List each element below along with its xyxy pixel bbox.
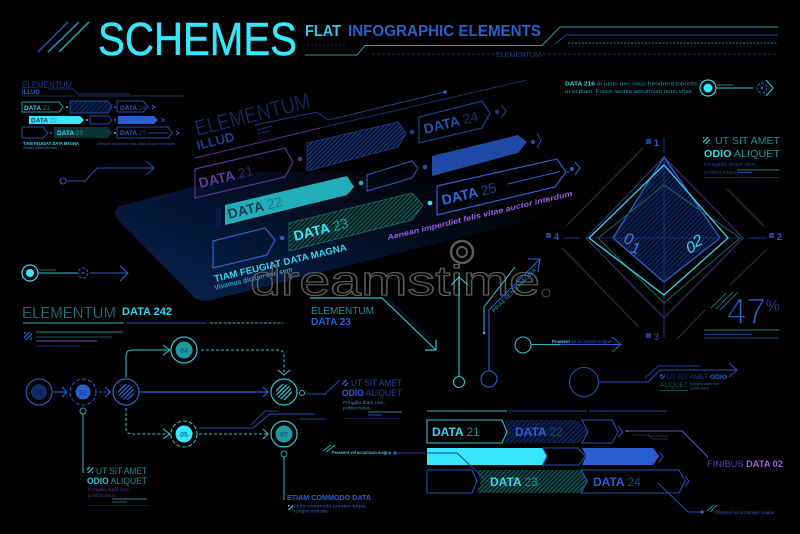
- panel: bottom data bars: [323, 411, 783, 515]
- bar: empty outlined: [427, 470, 477, 493]
- mini caption right: Aenean imperdiet felis vitae auctor interdum: [97, 141, 176, 146]
- perspective caption purple: Aenean imperdiet felis vitae auctor interdum: [385, 189, 574, 242]
- callout: node 06: [300, 378, 402, 418]
- axis label 4: [546, 232, 559, 242]
- rotated label: PRAESENT MAGNA: [491, 267, 538, 314]
- row: data 22 filled: DATA 22: [226, 193, 284, 222]
- label: elementum data 23: ELEMENTUM: [311, 306, 374, 317]
- icon: target connector: [700, 80, 773, 96]
- radar teal series: [598, 185, 740, 303]
- row: data 24: DATA 24: [422, 108, 480, 137]
- panel: mini data table: [22, 80, 183, 150]
- node 05: [171, 421, 197, 447]
- perspective caption small: Vivamus dictum nec sem: [214, 266, 293, 292]
- callout: node 06: UT SIT AMET: [351, 378, 402, 388]
- mini row 2: [29, 116, 164, 124]
- node 06: [271, 379, 297, 405]
- axis label 1: [646, 138, 659, 148]
- note text: DATA 216 at justo nec risus hendrerit lobortis: [565, 82, 697, 88]
- connector: small target with arrow: [515, 337, 621, 353]
- arrow: upper left connector: [60, 161, 154, 184]
- bar: blue filled: [582, 448, 663, 465]
- callout: node 07: congue molestie: [294, 508, 328, 514]
- node 03: [113, 379, 139, 405]
- radar blue hatched series: [613, 157, 720, 282]
- callout: node 07: [281, 451, 372, 514]
- callout: node 02: ODIO ALIQUET: [87, 476, 147, 486]
- arrow: up cyan: [451, 277, 468, 388]
- bar: data 24: DATA 24: [593, 475, 641, 489]
- label: elementum data 23: [311, 306, 374, 328]
- mini row 3: DATA 25: [120, 130, 146, 137]
- mini row 3: DATA 23: [57, 130, 83, 137]
- callout: node 06: ODIO ALIQUET: [342, 388, 402, 398]
- bar: data 22: [504, 420, 588, 443]
- node 01: [26, 379, 52, 405]
- radar axes: [564, 138, 767, 338]
- bar: cyan filled: [427, 448, 547, 465]
- panel: flow diagram: [22, 305, 402, 514]
- icon: title stripes: [38, 22, 89, 52]
- bar: data 23: DATA 23: [490, 475, 538, 489]
- connector: large circle arrow: Fringilla diam non,: [690, 382, 720, 386]
- radar label 02: 0: [684, 238, 699, 258]
- bar: data 21: DATA 21: [432, 425, 480, 439]
- connector: large circle arrow: UT SIT AMET ODIO: [667, 374, 727, 381]
- row: data 23 hatched: DATA 23: [292, 215, 350, 244]
- marker: [410, 130, 414, 134]
- node 07: [271, 421, 297, 447]
- node 02: 02: [79, 390, 87, 397]
- header rules: [305, 27, 778, 55]
- callout: right praesent: [658, 483, 774, 515]
- marker: [423, 165, 427, 169]
- axis label 3: [646, 332, 659, 342]
- bar: data 23: [477, 470, 588, 493]
- row: data 22 filled: [217, 176, 363, 227]
- axis label 2: 2: [777, 232, 782, 242]
- connector: large circle arrow: [570, 363, 737, 396]
- arrow: up right blue: [481, 259, 540, 387]
- mini row 1: [22, 101, 155, 113]
- subtitle blue: INFOGRAPHIC ELEMENTS: [348, 23, 541, 40]
- watermark: [250, 241, 550, 304]
- node 01: 01: [35, 390, 43, 397]
- node 07: 07: [280, 432, 288, 439]
- bar: outlined chevron top: [582, 420, 623, 443]
- node 04: [171, 337, 197, 363]
- flow connectors: [53, 345, 325, 439]
- callout: node 02: [80, 408, 147, 506]
- radar label 01: 0: [622, 230, 635, 249]
- stat rules: [704, 329, 779, 331]
- mini row 3: [22, 127, 179, 138]
- header small label: ELEMENTUM: [496, 52, 541, 59]
- row: data 21: [195, 148, 302, 198]
- callout: node 06: Fringilla diam non,: [343, 400, 385, 406]
- panel: radar chart: [546, 135, 782, 342]
- perspective heading: ELEMENTUM: [192, 88, 313, 141]
- mini rules: [22, 89, 183, 96]
- stat stripes: [711, 292, 738, 310]
- mini row 1: DATA 24: [120, 105, 146, 112]
- perspective rules: [195, 80, 527, 158]
- stat 47%: 47: [727, 291, 768, 332]
- callout: node 07: Nunc commodo porttitor turpis,: [294, 504, 367, 510]
- bar: data 21: [427, 420, 507, 443]
- row: data 23 hatched: [289, 193, 423, 251]
- marker: [280, 236, 284, 240]
- callout: finibus: FINIBUS DATA 02: [707, 459, 783, 470]
- bar: data 24: [581, 470, 689, 493]
- radar outer diamond: [586, 157, 743, 318]
- callout: node 06: porttitor metus.: [343, 406, 371, 412]
- panel: glass backdrop: [115, 172, 590, 301]
- mini row 2: DATA 22: [31, 118, 57, 124]
- mini heading: ELEMENTUM: [22, 80, 72, 90]
- marker: [428, 201, 432, 205]
- connector: large circle arrow: ALIQUET: [660, 382, 688, 389]
- axis label 1: 1: [654, 138, 659, 148]
- radar cyan series: [589, 165, 728, 295]
- callout: right praesent: Praesent vel accumsan magna: [715, 510, 774, 515]
- axis label 3: 3: [654, 332, 659, 342]
- axis label 4: 4: [554, 232, 559, 242]
- panel: perspective data chart: [192, 80, 580, 292]
- panel: top right note: [565, 80, 773, 96]
- radar note: Fringilla diam non,: [704, 162, 758, 168]
- node 05: 05: [180, 432, 188, 439]
- bar: outlined middle: [543, 448, 585, 465]
- title block: [38, 13, 778, 65]
- arrow: diagonal down: [310, 296, 436, 350]
- radar note: [703, 135, 781, 178]
- mini row 1: DATA 21: [24, 105, 50, 112]
- row: filled blue: [432, 135, 527, 176]
- stat 47%: %: [766, 296, 780, 315]
- watermark: dreamstime: [250, 257, 540, 304]
- mini caption: TIAM FEUGIAT DATA MAGNA: [23, 141, 80, 146]
- connector: small target with arrow: Praesent vel accumsan magna: [552, 339, 611, 344]
- mini caption small: Vivamus dictum nec sem: [23, 146, 57, 150]
- node 02: [70, 379, 96, 405]
- bar: data 22: DATA 22: [515, 425, 563, 439]
- row: hatched blue: [307, 122, 406, 171]
- callout: left praesent: [323, 445, 488, 482]
- callout: node 07: ETIAM COMMODO DATA: [287, 493, 372, 502]
- marker with chevron: [531, 133, 541, 148]
- perspective subheading: ILLUD: [195, 129, 236, 153]
- callout: node 02: UT SIT AMET: [96, 466, 147, 476]
- row: outlined box: [367, 161, 418, 191]
- connector: large circle arrow: porttitor metus.: [690, 386, 710, 390]
- title: SCHEMES: [98, 13, 297, 65]
- callout: node 02: porttitor metus.: [88, 493, 116, 499]
- row: data 25: DATA 25: [440, 179, 498, 208]
- bars top rules: [427, 410, 507, 412]
- subtitle: FLAT: [305, 23, 341, 40]
- flow heading data: DATA 242: [122, 306, 172, 318]
- flow hatch icon: [24, 332, 32, 340]
- perspective caption: TIAM FEUGIAT DATA MAGNA: [213, 242, 348, 285]
- row: data 24: [419, 101, 506, 143]
- mini subheading: ILLUD: [22, 90, 40, 96]
- radar label 02: 2: [689, 232, 706, 252]
- callout: left praesent: Praesent vel accumsan magna: [332, 450, 391, 455]
- callout: finibus: [626, 430, 783, 470]
- node 04: 04: [180, 348, 188, 355]
- arrow: left target connector: [22, 265, 128, 281]
- label: elementum data 23: DATA 23: [311, 317, 351, 328]
- callout: node 02: Fringilla diam non,: [88, 487, 130, 493]
- row: data 21: DATA 21: [197, 162, 255, 191]
- radar note: ODIO ALIQUET: [704, 148, 781, 160]
- row: empty outlined: [213, 228, 275, 268]
- note text line 2: ut et diam. Fusce lacinia accumsan nunc vitae: [565, 89, 692, 95]
- radar label 01: 1: [629, 240, 642, 258]
- radar note: porttitor metus.: [704, 170, 738, 176]
- axis label 2: [769, 232, 782, 242]
- radar note: UT SIT AMET: [715, 135, 781, 147]
- flow heading: ELEMENTUM: [22, 305, 116, 322]
- row: data 25: [437, 159, 580, 215]
- bars top rule blue: [509, 410, 667, 412]
- flow rules: [23, 323, 283, 346]
- radar outer diagonals: [562, 148, 766, 339]
- radar inner axes: [586, 157, 743, 320]
